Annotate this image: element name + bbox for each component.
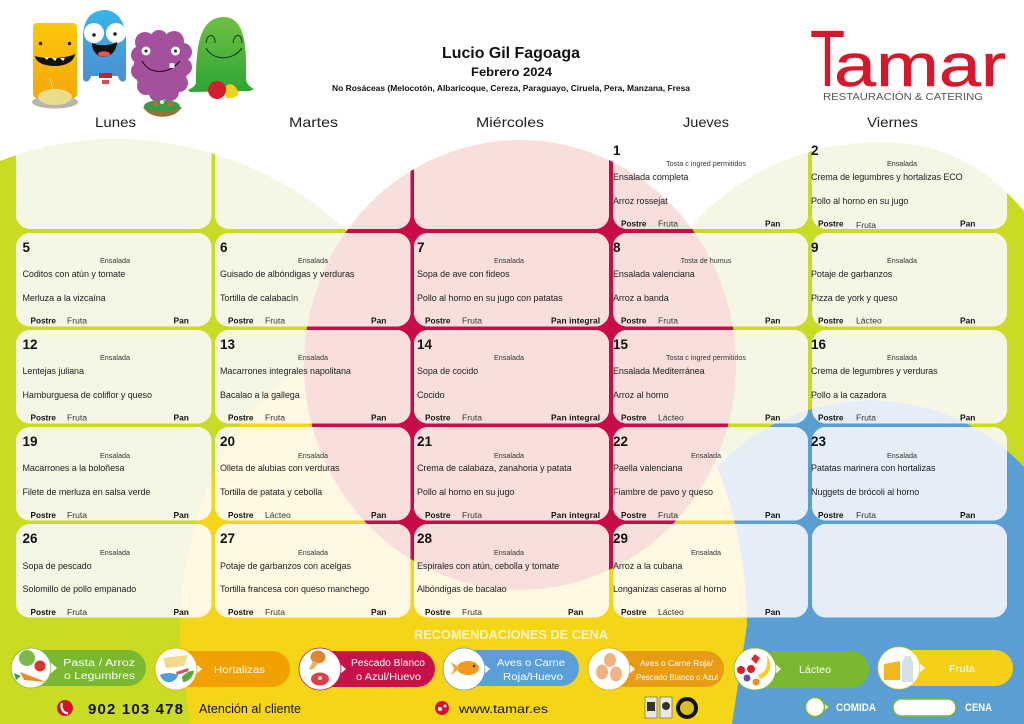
pill: poultry or meat	[443, 648, 579, 690]
card: day 13: Macarrones integrales napolitana	[220, 366, 351, 376]
card: day 2: Ensalada	[887, 159, 917, 168]
card: day 28: Postre	[425, 608, 451, 617]
card: day 19: 19	[22, 434, 38, 449]
card: day 9: Postre	[818, 316, 844, 326]
card: day 20: Lácteo	[265, 510, 291, 520]
card: day 5: Merluza a la vizcaína	[22, 293, 106, 303]
card: day 22: Postre	[621, 511, 647, 520]
card: day 7: Postre	[425, 316, 451, 326]
card: day 19: Fruta	[67, 510, 87, 520]
card: day 9: Pizza de york y queso	[811, 293, 898, 303]
card: day 8: Ensalada valenciana	[613, 269, 695, 279]
card: day 19	[16, 427, 212, 520]
card: day 26: Solomillo de pollo empanado	[22, 584, 136, 594]
card: day 5: Postre	[30, 316, 56, 326]
card: day 19: Pan	[174, 510, 189, 520]
card: day 28	[414, 524, 609, 618]
card: day 20: Pan	[371, 510, 386, 520]
icon: blue monster with cup	[83, 10, 126, 87]
logo: Tamar: T	[810, 14, 845, 103]
card: day 15: Lácteo	[658, 412, 684, 422]
card: day 2: Crema de legumbres y hortalizas ECO	[811, 172, 963, 182]
card: day 5: Coditos con atún y tomate	[22, 269, 125, 279]
card: day 23	[811, 427, 1007, 520]
card: day 12: Fruta	[67, 412, 87, 422]
pill: fruit: Fruta	[949, 664, 975, 675]
icon: green monster with fruit	[188, 17, 254, 99]
card: day 27: 27	[220, 531, 235, 546]
card: day 27: Pan	[371, 607, 386, 617]
card: day 8: Arroz a banda	[613, 293, 669, 303]
customer service phone: 902 103 478	[88, 701, 183, 718]
pill: dairy	[734, 648, 869, 690]
card: day 21: Pollo al horno en su jugo	[417, 487, 514, 497]
weekday headings	[95, 115, 918, 130]
card: day 2: Postre	[818, 220, 844, 228]
card: day 7	[414, 233, 609, 326]
card: day 22: Fiambre de pavo y queso	[613, 487, 713, 497]
card: day 20	[215, 427, 410, 520]
card: day 22: Fruta	[658, 510, 678, 520]
card: day 28: Albóndigas de bacalao	[417, 584, 507, 594]
card: day 5	[16, 233, 212, 326]
card: day 19: Filete de merluza en salsa verde	[22, 487, 150, 497]
card: day 14: Pan integral	[551, 412, 600, 422]
card: day 20: Olleta de alubias con verduras	[220, 463, 340, 473]
card: day 15: Tosta c ingred permitidos	[666, 353, 746, 362]
card: day 8: Postre	[621, 316, 647, 326]
card: day 26: Pan	[174, 607, 189, 617]
certification badges	[645, 697, 696, 718]
card: day 14: 14	[417, 337, 433, 352]
card: day 27: Fruta	[265, 607, 285, 617]
pill: fish or egg: Pescado Blanco	[351, 658, 425, 669]
weekday headings: Jueves	[683, 115, 729, 130]
card: day 27: Tortilla francesa con queso manchego	[220, 584, 369, 594]
card: day 1: Pan	[765, 218, 780, 228]
card: day 29	[613, 524, 808, 618]
card: day 28: Espirales con atún, cebolla y tomate	[417, 561, 559, 571]
card: day 7: Fruta	[462, 316, 482, 326]
card: day 16: Pollo a la cazadora	[811, 390, 886, 400]
card: day 14: Postre	[425, 414, 451, 422]
card: day 16: Crema de legumbres y verduras	[811, 366, 938, 376]
card: day 6: Pan	[371, 316, 386, 326]
card: day 14: Fruta	[462, 412, 482, 422]
illustration: food monsters	[32, 10, 254, 117]
icon: yellow monster with pasta	[32, 23, 78, 108]
legend: lunch and dinner	[806, 698, 992, 716]
card: day 22: 22	[613, 434, 628, 449]
card: day 2	[811, 135, 1007, 230]
card: day 20: Tortilla de patata y cebolla	[220, 487, 322, 497]
card: day 13: Ensalada	[298, 353, 328, 362]
card: day 2: Pollo al horno en su jugo	[811, 196, 908, 206]
legend: lunch and dinner: COMIDA	[836, 702, 876, 714]
card: day 19: Postre	[30, 511, 56, 520]
card: day 6	[215, 233, 410, 326]
card: day 29: Pan	[765, 607, 780, 617]
card: day 23: Fruta	[856, 510, 876, 520]
card: day 21: Pan integral	[551, 510, 600, 520]
card: day 9: Pan	[960, 316, 975, 326]
card: day 12: 12	[22, 337, 38, 352]
pill: poultry, meat or fish: Pescado Blanco o Azul	[636, 673, 718, 682]
card: day 21: Ensalada	[494, 451, 524, 460]
pill: dairy: Lácteo	[799, 665, 831, 676]
card: day 29: Postre	[621, 608, 647, 617]
card: day 6: Postre	[228, 316, 254, 326]
card: day 15: 15	[613, 337, 629, 352]
card: day 9: Ensalada	[887, 256, 917, 265]
card: day 23: 23	[811, 434, 827, 449]
card: day 29: Ensalada	[691, 548, 721, 557]
card: day 7: 7	[417, 240, 425, 255]
card: day 8: Pan	[765, 316, 780, 326]
pill: pasta, rice or legumes: o Legumbres	[64, 671, 135, 682]
card: day 26: Fruta	[67, 607, 87, 617]
card: empty Tuesday	[215, 135, 410, 229]
card: day 29: Arroz a la cubana	[613, 561, 682, 571]
card: day 20: Ensalada	[298, 451, 328, 460]
card: day 16: Pan	[960, 412, 975, 422]
card: empty Monday	[16, 135, 212, 229]
card: day 12: Pan	[174, 412, 189, 422]
card: day 9: Lácteo	[856, 316, 882, 326]
card: day 29: 29	[613, 531, 628, 546]
icon: purple monster with salad	[131, 30, 192, 117]
card: day 28: 28	[417, 531, 433, 546]
card: day 15	[613, 330, 808, 424]
weekday headings: Viernes	[867, 115, 918, 130]
pill: vegetables	[155, 648, 290, 690]
card: day 23: Ensalada	[887, 451, 917, 460]
card: day 29: Lácteo	[658, 607, 684, 617]
card: day 1: 1	[613, 143, 621, 158]
card: day 6: Tortilla de calabacín	[220, 293, 298, 303]
pill: fruit	[878, 647, 1013, 689]
card: day 9	[811, 233, 1007, 326]
card: day 2: Fruta	[856, 220, 876, 230]
card: day 23: Pan	[960, 510, 975, 520]
card: day 16: 16	[811, 337, 827, 352]
pill: pasta, rice or legumes	[11, 648, 146, 688]
card: day 5: 5	[22, 240, 30, 255]
card: day 21: 21	[417, 434, 433, 449]
card: day 28: Fruta	[462, 607, 482, 617]
customer service phone	[57, 700, 301, 718]
card: day 1: Ensalada completa	[613, 172, 688, 182]
card: day 15: Postre	[621, 414, 647, 422]
calendar grid	[16, 135, 1007, 618]
card: day 26: 26	[22, 531, 38, 546]
card: day 8	[613, 233, 808, 326]
card: day 16: Postre	[818, 414, 844, 422]
card: day 1: Postre	[621, 220, 647, 228]
card: day 7: Sopa de ave con fideos	[417, 269, 510, 279]
card: day 9: Potaje de garbanzos	[811, 269, 893, 279]
card: day 12	[16, 330, 212, 424]
pill: poultry, meat or fish: Aves o Carne Roja/	[640, 659, 714, 668]
title: Lucio Gil Fagoaga	[442, 45, 580, 62]
card: day 7: Pan integral	[551, 316, 600, 326]
weekday headings: Lunes	[95, 115, 136, 130]
background: pale card tints	[16, 139, 1007, 618]
card: day 12: Lentejas juliana	[22, 366, 84, 376]
card: day 12: Ensalada	[100, 353, 130, 362]
website	[435, 701, 548, 716]
card: day 14	[414, 330, 609, 424]
card: day 21: Crema de calabaza, zanahoria y patata	[417, 463, 572, 473]
card: day 5: Ensalada	[100, 256, 130, 265]
card: day 14: Sopa de cocido	[417, 366, 478, 376]
pill: pasta, rice or legumes: Pasta / Arroz	[63, 658, 135, 669]
card: day 27	[215, 524, 410, 618]
card: day 12: Hamburguesa de coliflor y queso	[22, 390, 152, 400]
card: day 23: Patatas marinera con hortalizas	[811, 463, 936, 473]
card: day 16	[811, 330, 1007, 424]
card: day 13: 13	[220, 337, 236, 352]
card: day 8: 8	[613, 240, 621, 255]
card: day 1: Tosta c ingred permitidos	[666, 159, 746, 168]
card: day 16: Ensalada	[887, 353, 917, 362]
pill: vegetables: Hortalizas	[214, 665, 265, 676]
card: day 13	[215, 330, 410, 424]
customer service phone: Atención al cliente	[199, 702, 301, 716]
card: day 21	[414, 427, 609, 520]
logo: Tamar	[810, 14, 1006, 103]
weekday headings: Martes	[289, 115, 338, 130]
card: day 19: Ensalada	[100, 451, 130, 460]
card: day 8: Tosta de humus	[681, 256, 732, 265]
card: day 15: Arroz al horno	[613, 390, 669, 400]
pill: fish or egg: o Azul/Huevo	[356, 672, 421, 683]
card: day 16: Fruta	[856, 412, 876, 422]
card: day 22: Paella valenciana	[613, 463, 682, 473]
card: day 7: Pollo al horno en su jugo con patatas	[417, 293, 563, 303]
card: day 2: 2	[811, 143, 819, 158]
card: day 5: Fruta	[67, 316, 87, 326]
card: day 26: Postre	[30, 608, 56, 617]
card: day 6: 6	[220, 240, 228, 255]
card: empty Friday	[812, 524, 1007, 618]
card: day 20: 20	[220, 434, 235, 449]
card: day 13: Fruta	[265, 412, 285, 422]
card: day 19: Macarrones a la boloñesa	[22, 463, 124, 473]
card: day 14: Cocido	[417, 390, 445, 400]
card: day 15: Ensalada Mediterránea	[613, 366, 705, 376]
card: day 28: Ensalada	[494, 548, 524, 557]
logo: Tamar: amar	[834, 32, 1006, 99]
weekday headings: Miércoles	[476, 115, 544, 130]
card: day 7: Ensalada	[494, 256, 524, 265]
card: day 2: Pan	[960, 218, 975, 228]
card: day 1: Arroz rossejat	[613, 196, 668, 206]
card: day 21: Postre	[425, 511, 451, 520]
card: day 5: Pan	[174, 316, 189, 326]
legend: lunch and dinner: CENA	[965, 702, 992, 714]
card: day 20: Postre	[228, 511, 254, 520]
card: day 22: Pan	[765, 510, 780, 520]
card: day 14: Ensalada	[494, 353, 524, 362]
card: day 27: Ensalada	[298, 548, 328, 557]
card: day 1	[613, 135, 808, 229]
subtitle: Febrero 2024	[471, 65, 552, 79]
card: day 8: Fruta	[658, 316, 678, 326]
card: day 13: Postre	[228, 414, 254, 422]
card: day 23: Nuggets de brócoli al horno	[811, 487, 919, 497]
card: day 23: Postre	[818, 511, 844, 520]
card: day 6: Fruta	[265, 316, 285, 326]
pill: poultry, meat or fish	[588, 648, 724, 690]
heading: dinner recommendations: RECOMENDACIONES DE CENA	[414, 628, 608, 642]
card: day 1: Fruta	[658, 218, 678, 228]
card: day 13: Bacalao a la gallega	[220, 390, 300, 400]
pill: poultry or meat: Aves o Carne	[497, 658, 565, 669]
card: day 6: Guisado de albóndigas y verduras	[220, 269, 355, 279]
card: day 27: Potaje de garbanzos con acelgas	[220, 561, 351, 571]
card: day 26: Sopa de pescado	[22, 561, 92, 571]
pill: poultry or meat: Roja/Huevo	[503, 672, 563, 683]
card: day 22	[613, 427, 808, 520]
card: day 9: 9	[811, 240, 819, 255]
card: day 12: Postre	[30, 414, 56, 422]
card: day 27: Postre	[228, 608, 254, 617]
card: day 6: Ensalada	[298, 256, 328, 265]
diet note: No Rosáceas (Melocotón, Albaricoque, Cereza, Paraguayo, Ciruela, Pera, Manzana, Fresa	[332, 84, 691, 93]
website: www.tamar.es	[458, 702, 548, 716]
card: day 28: Pan	[568, 607, 583, 617]
card: day 26: Ensalada	[100, 548, 130, 557]
logo: Tamar: RESTAURACIÓN & CATERING	[823, 90, 983, 103]
card: day 15: Pan	[765, 412, 780, 422]
card: day 21: Fruta	[462, 510, 482, 520]
pill: fish or egg	[299, 648, 435, 690]
card: empty Wednesday	[414, 135, 609, 229]
card: day 26	[16, 524, 212, 618]
card: day 13: Pan	[371, 412, 386, 422]
card: day 22: Ensalada	[691, 451, 721, 460]
card: day 29: Longanizas caseras al horno	[613, 584, 726, 594]
